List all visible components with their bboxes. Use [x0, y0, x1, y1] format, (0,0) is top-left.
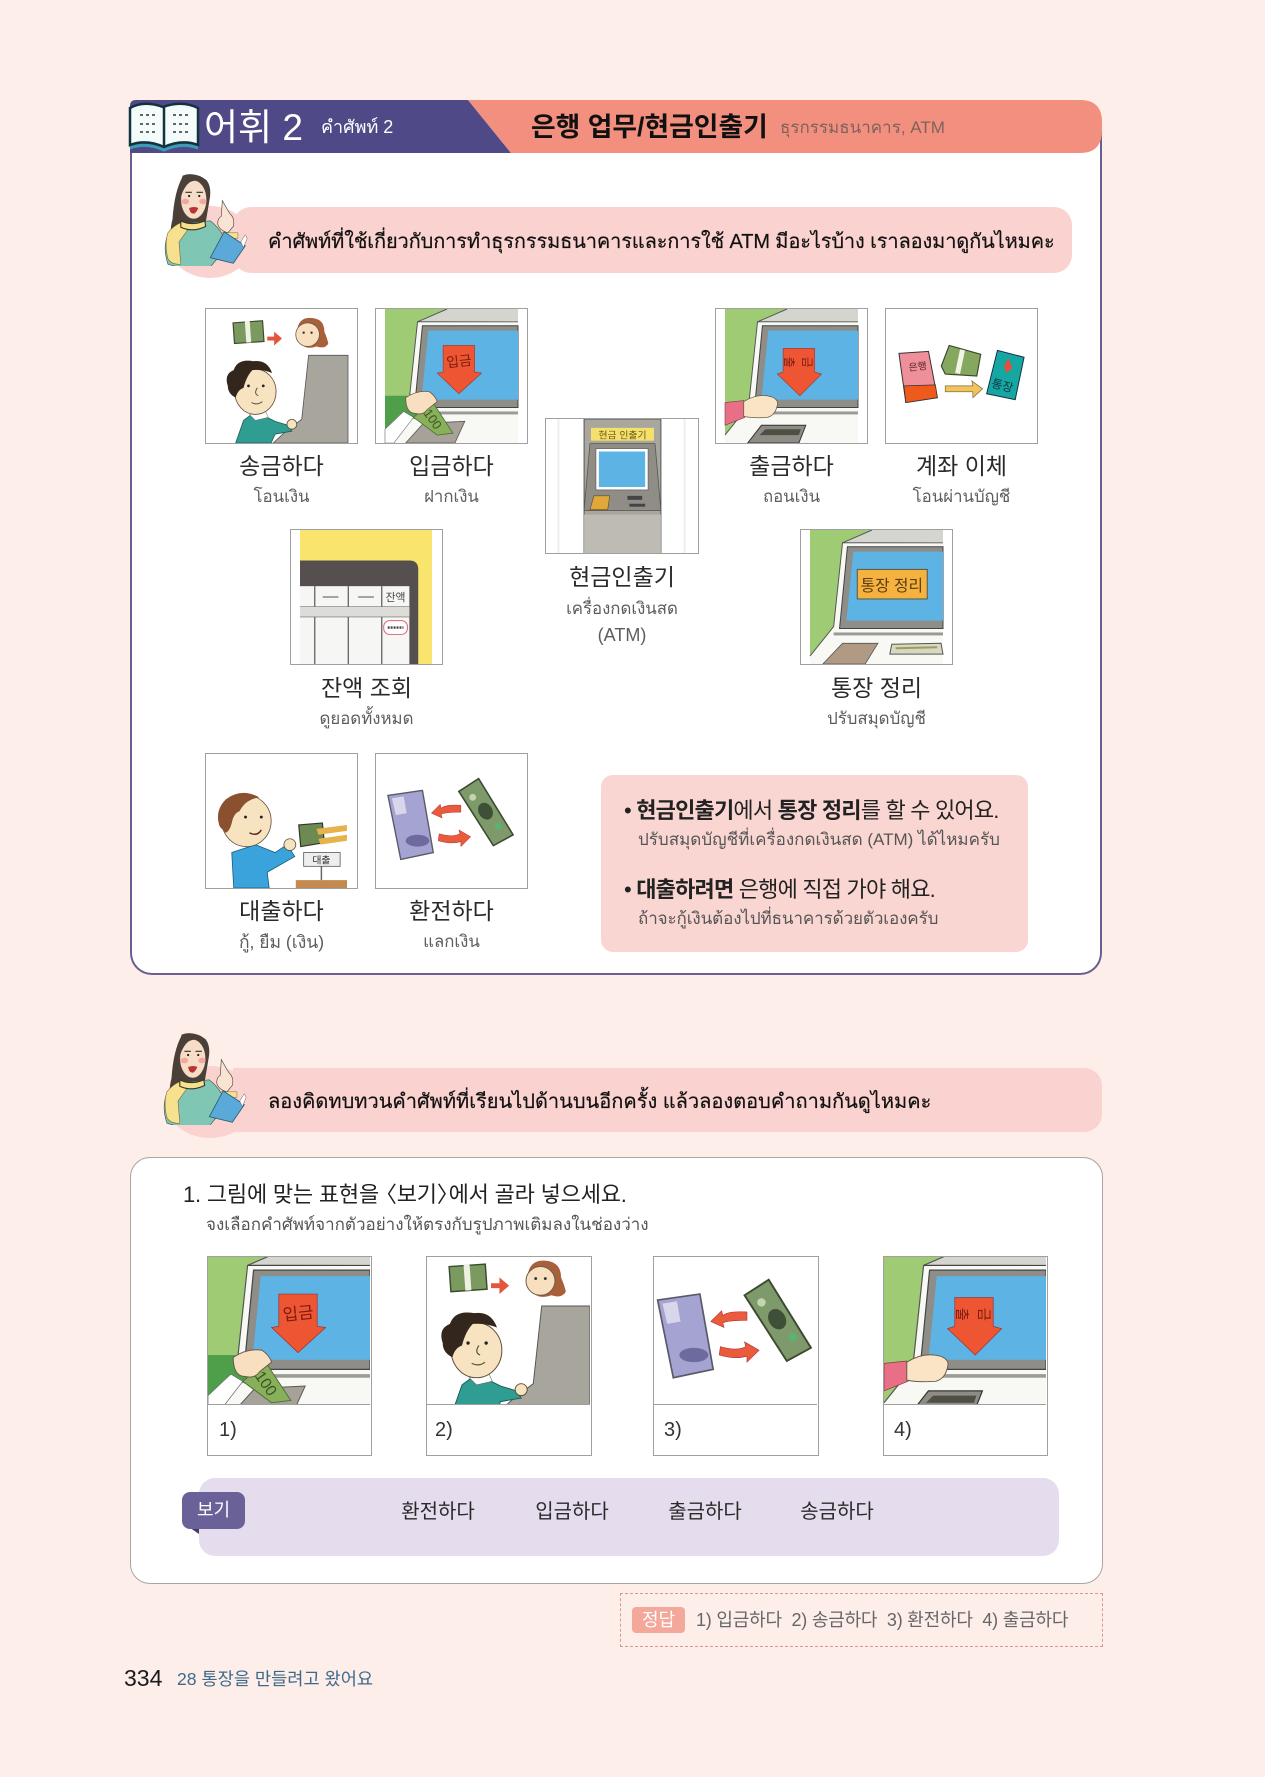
caption: balance inquiry: 잔액 조회 — [321, 675, 412, 701]
caption: currency exchange: 환전하다 — [409, 898, 494, 924]
answer label 2: 2) — [435, 1419, 453, 1441]
picture: loan: 대출 — [312, 852, 330, 866]
caption: ATM — [566, 564, 678, 645]
speech banner: review — [164, 1033, 1102, 1138]
tip 1 korean: • 현금인출기에서 통장 정리를 할 수 있어요. — [624, 798, 999, 823]
question Thai: จงเลือกคำศัพท์จากตัวอย่างให้ตรงกับรูปภาพเติมลงในช่องว่าง — [206, 1215, 649, 1234]
picture: ATM: 현금 인출기 — [598, 428, 647, 442]
caption: currency exchange: แลกเงิน — [423, 932, 480, 951]
exercise card 1 — [207, 1256, 372, 1456]
caption: balance inquiry: ดูยอดทั้งหมด — [320, 709, 414, 728]
tip 2 thai: ถ้าจะกู้เงินต้องไปที่ธนาคารด้วยตัวเองครับ — [638, 909, 938, 928]
subheading: banking and ATM in Thai: ธุรกรรมธนาคาร, ATM — [780, 118, 945, 137]
heading: vocabulary 2: 어휘 2 — [204, 107, 303, 148]
picture: account transfer: 통장 — [990, 374, 1015, 396]
heading: banking and ATM: 은행 업무/현금인출기 — [531, 112, 768, 142]
caption: loan: 대출하다 — [239, 898, 324, 924]
picture: withdraw — [715, 308, 868, 444]
picture: passbook update: 통장 정리 — [861, 573, 923, 596]
caption: deposit — [409, 453, 494, 506]
caption: send money: โอนเงิน — [254, 487, 309, 506]
icon: teacher — [164, 1033, 246, 1125]
banner text: ลองคิดทบทวนคำศัพท์ที่เรียนไปด้านบนอีกครั้ง แล้วลองตอบคำถามกันดูไหมคะ — [268, 1091, 931, 1113]
answer tag — [632, 1607, 685, 1633]
exercise card 3 — [653, 1256, 819, 1456]
word bank — [182, 1478, 1059, 1556]
caption: deposit: 입금하다 — [409, 453, 494, 479]
word: send: 송금하다 — [800, 1501, 874, 1523]
word: deposit: 입금하다 — [535, 1501, 609, 1523]
caption: send money: 송금하다 — [239, 453, 324, 479]
panel: exercise — [130, 1157, 1103, 1584]
picture: currency exchange — [375, 753, 528, 889]
icon: open book — [128, 102, 200, 152]
caption: ATM: (ATM) — [598, 625, 646, 645]
caption: loan: กู้, ยืม (เงิน) — [239, 932, 324, 952]
speech banner: top — [164, 174, 1072, 278]
page number: 334 — [124, 1665, 162, 1691]
caption: account transfer: 계좌 이체 — [916, 453, 1007, 479]
picture: account transfer: 은행 — [908, 358, 927, 374]
caption: account transfer — [912, 453, 1010, 506]
picture: send money — [205, 308, 358, 444]
caption: passbook update: 통장 정리 — [831, 675, 922, 701]
word bank tag — [182, 1492, 245, 1529]
answer label 3: 3) — [664, 1419, 682, 1441]
picture: account transfer — [885, 308, 1038, 444]
caption: withdraw — [749, 453, 834, 506]
picture: loan — [205, 753, 358, 889]
caption: ATM: เครื่องกดเงินสด — [566, 599, 678, 618]
section header bar — [128, 100, 1102, 153]
banner text: คำศัพท์ที่ใช้เกี่ยวกับการทำธุรกรรมธนาคารและการใช้ ATM มีอะไรบ้าง เราลองมาดูกันไหมคะ — [268, 231, 1055, 253]
question heading: 1. 그림에 맞는 표현을 〈보기〉에서 골라 넣으세요. — [183, 1182, 627, 1207]
caption: passbook update — [827, 675, 926, 728]
heading: Thai vocabulary 2: คำศัพท์ 2 — [321, 117, 393, 137]
picture: deposit — [375, 308, 528, 444]
word: exchange: 환전하다 — [401, 1501, 475, 1523]
answer box — [620, 1593, 1103, 1647]
caption: send money — [239, 453, 324, 506]
caption: withdraw: 출금하다 — [749, 453, 834, 479]
picture: balance inquiry: 잔액 — [386, 589, 406, 605]
picture: ATM — [545, 418, 699, 554]
word bank tag: 보기 — [197, 1500, 230, 1520]
answers: 1) 입금하다 2) 송금하다 3) 환전하다 4) 출금하다 — [696, 1610, 1068, 1630]
answer tag: 정답 — [642, 1610, 675, 1630]
caption: withdraw: ถอนเงิน — [763, 487, 820, 506]
answer label 1: 1) — [219, 1419, 237, 1441]
caption: deposit: ฝากเงิน — [424, 487, 479, 506]
exercise card 2 — [426, 1256, 592, 1456]
callout: tips — [601, 775, 1028, 952]
exercise card 4 — [883, 1256, 1048, 1456]
caption: balance inquiry — [320, 675, 414, 728]
caption: currency exchange — [409, 898, 494, 951]
chapter title: 28 통장을 만들려고 왔어요 — [177, 1669, 373, 1689]
caption: account transfer: โอนผ่านบัญชี — [913, 487, 1010, 506]
panel: vocabulary — [130, 130, 1102, 975]
caption: loan — [239, 898, 324, 952]
caption: passbook update: ปรับสมุดบัญชี — [827, 709, 926, 728]
tip 1 thai: ปรับสมุดบัญชีที่เครื่องกดเงินสด (ATM) ได้ไหมครับ — [638, 830, 1000, 849]
word: withdraw: 출금하다 — [668, 1501, 742, 1523]
answer label 4: 4) — [894, 1419, 912, 1441]
caption: ATM: 현금인출기 — [569, 564, 675, 590]
picture: passbook update — [800, 529, 953, 665]
icon: teacher — [164, 174, 248, 266]
tip 2 korean: • 대출하려면 은행에 직접 가야 해요. — [624, 877, 935, 902]
picture: balance inquiry — [290, 529, 443, 665]
